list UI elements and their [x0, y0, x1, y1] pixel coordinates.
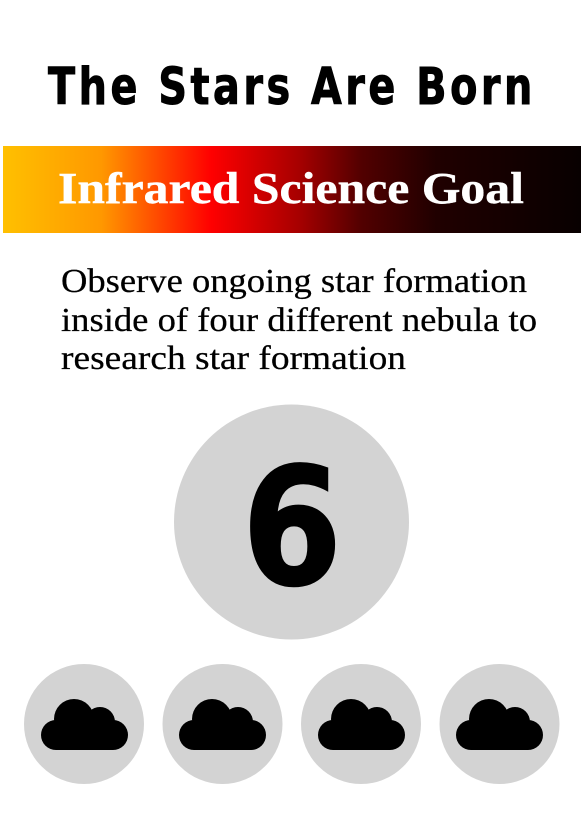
big number circle	[174, 404, 409, 640]
nebula icon 1	[24, 664, 144, 784]
nebula icon 2	[162, 664, 282, 784]
banner heading: Infrared Science Goal	[58, 164, 524, 213]
nebula icon 4	[440, 664, 560, 784]
number 6: 6	[242, 433, 342, 623]
nebula icon 3	[301, 664, 421, 784]
description text	[61, 263, 537, 377]
title: The Stars Are Born	[48, 57, 532, 116]
description text: research star formation	[61, 340, 406, 377]
description text: Observe ongoing star formation	[61, 263, 527, 300]
description text: inside of four different nebula to	[61, 302, 537, 339]
banner	[3, 146, 581, 233]
